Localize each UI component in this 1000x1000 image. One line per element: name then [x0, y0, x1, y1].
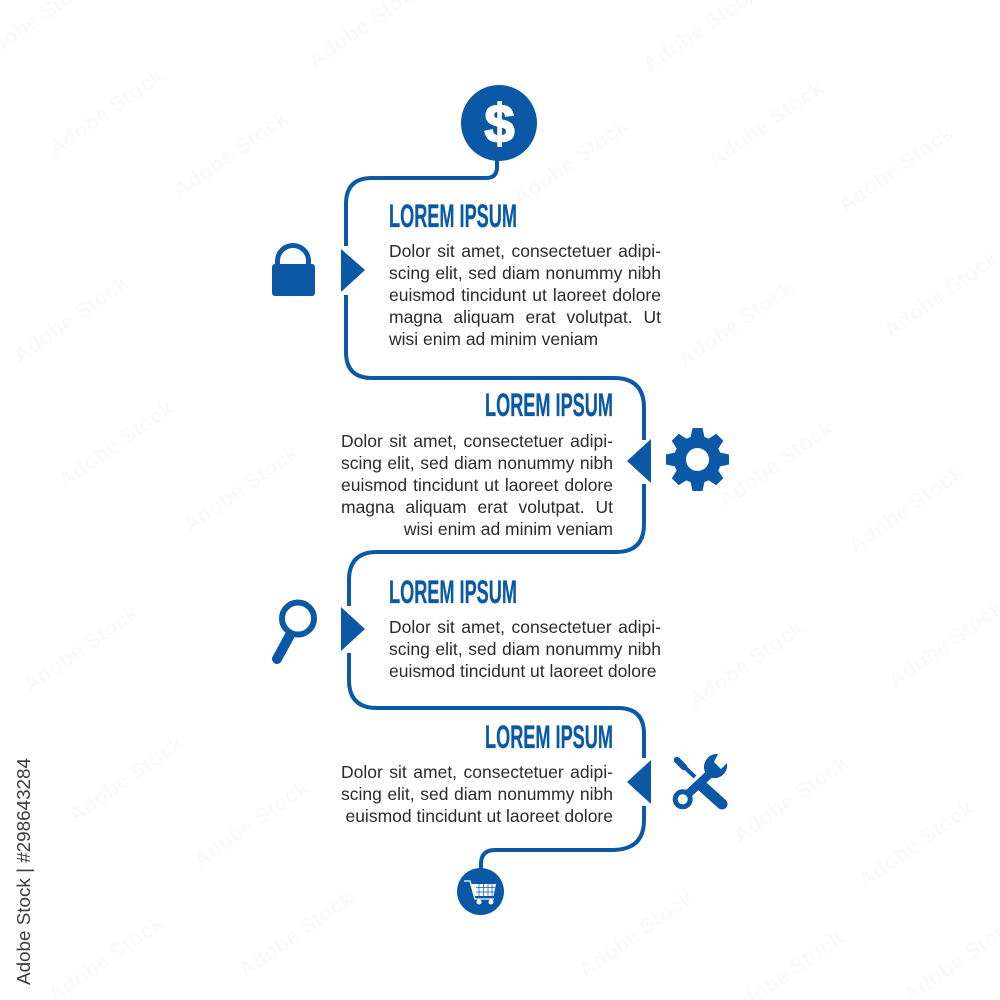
text block 4: Dolor sit amet, consectetuer adipi- — [341, 762, 613, 782]
text: Adobe Stock — [178, 440, 304, 538]
arrow marker 1 — [341, 249, 365, 292]
timeline connector path — [346, 155, 644, 875]
arrow marker 3 — [341, 607, 365, 651]
text block 4 — [341, 762, 613, 826]
text block 2: wisi enim ad minim veniam — [404, 519, 613, 539]
text block 3: euismod tincidunt ut laoreet dolore — [389, 661, 657, 681]
text block 2 — [341, 431, 613, 539]
text: Adobe Stock — [728, 750, 854, 848]
icon: shopping cart circle — [457, 868, 504, 915]
arrow marker 2 — [627, 439, 651, 483]
text: Adobe Stock — [53, 395, 179, 493]
heading 1: LOREM IPSUM — [389, 198, 517, 234]
arrow marker 4 — [627, 760, 651, 804]
icon: wrench and screwdriver — [675, 754, 727, 807]
text: Adobe Stock — [703, 75, 829, 173]
icon: gear — [666, 428, 729, 491]
heading 3: LOREM IPSUM — [389, 574, 517, 610]
text block 3: Dolor sit amet, consectetuer adipi- — [389, 617, 661, 637]
text: Adobe Stock — [233, 885, 359, 983]
text: Adobe Stock — [878, 245, 1000, 343]
icon: dollar circle: $ — [484, 94, 515, 154]
text block 4: scing elit, sed diam nonummy nibh — [341, 784, 613, 804]
text: Adobe Stock — [573, 885, 699, 983]
icon: padlock — [272, 245, 315, 296]
text block 2: scing elit, sed diam nonummy nibh — [341, 453, 613, 473]
heading 2: LOREM IPSUM — [485, 387, 613, 423]
text block 4: euismod tincidunt ut laoreet dolore — [345, 806, 613, 826]
text block 1: euismod tincidunt ut laoreet dolore — [389, 285, 661, 305]
icon: magnifying glass — [277, 602, 314, 659]
text: Adobe Stock — [168, 105, 294, 203]
text: Adobe Stock — [18, 600, 144, 698]
text: Adobe Stock — [833, 120, 959, 218]
text: Adobe Stock — [188, 775, 314, 873]
text: Adobe Stock — [43, 63, 169, 161]
text block 1: Dolor sit amet, consectetuer adipi- — [389, 241, 661, 261]
text block 1: scing elit, sed diam nonummy nibh — [389, 263, 661, 283]
text: Adobe Stock — [508, 113, 634, 211]
text: Adobe Stock — [63, 730, 189, 828]
text block 3: scing elit, sed diam nonummy nibh — [389, 639, 661, 659]
icon: dollar circle — [461, 85, 537, 161]
text block 2: Dolor sit amet, consectetuer adipi- — [341, 431, 613, 451]
text: Adobe Stock — [843, 460, 969, 558]
text block 1 — [389, 241, 661, 349]
text block 2: magna aliquam erat volutpat. Ut — [341, 497, 613, 517]
text: Adobe Stock — [683, 615, 809, 713]
text block 2: euismod tincidunt ut laoreet dolore — [341, 475, 613, 495]
stock credit: Adobe Stock | #298643284 — [14, 758, 34, 985]
text block 3 — [389, 617, 661, 681]
text: Adobe Stock — [853, 795, 979, 893]
text block 1: magna aliquam erat volutpat. Ut — [389, 307, 661, 327]
text: Adobe Stock — [713, 415, 839, 513]
heading 4: LOREM IPSUM — [485, 719, 613, 755]
text: Adobe Stock — [673, 275, 799, 373]
text block 1: wisi enim ad minim veniam — [389, 329, 598, 349]
text: Adobe Stock — [8, 270, 134, 368]
